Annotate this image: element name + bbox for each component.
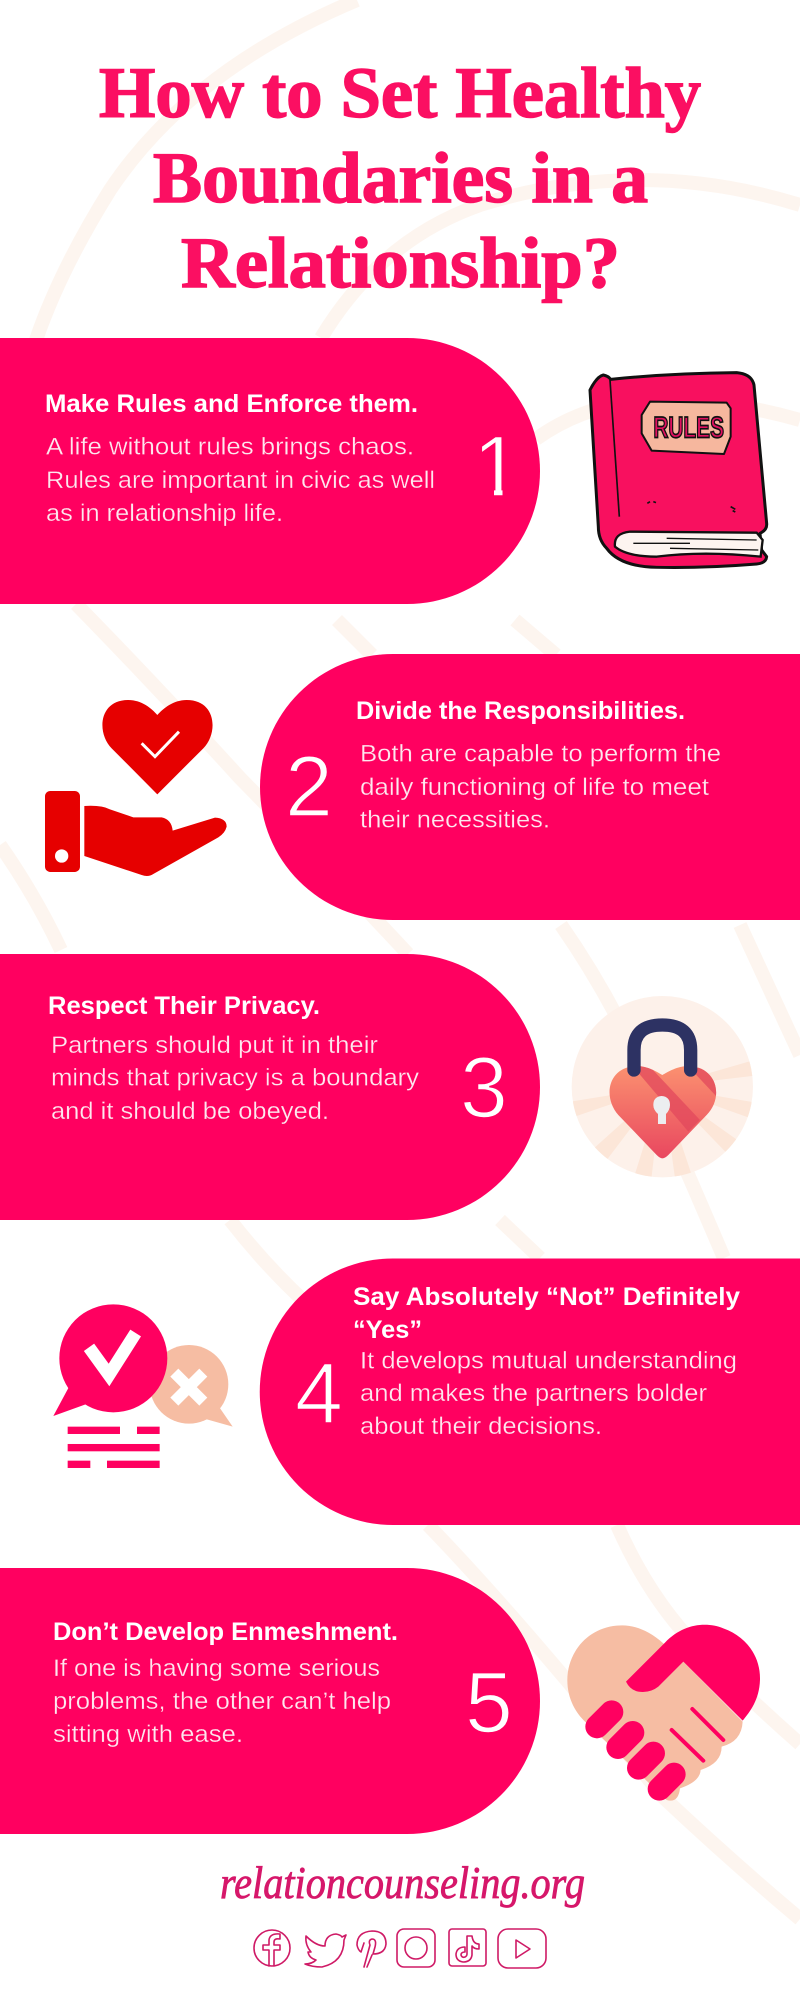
body text: step 1: Rules are important in civic as well [46, 467, 435, 494]
body text: step 4 [360, 1348, 737, 1440]
number 3: 3 [460, 1040, 508, 1136]
body text: step 2 [360, 740, 721, 834]
title: Relationship? [181, 223, 620, 303]
icon: hand holding heart [45, 700, 227, 876]
title: Boundaries in a [153, 138, 648, 218]
number 4: 4 [295, 1346, 343, 1442]
icon: rules book [590, 373, 767, 568]
icon: youtube [498, 1929, 546, 1968]
body text: step 3: minds that privacy is a boundary [51, 1065, 420, 1092]
number 5: 5 [465, 1655, 513, 1751]
panel: step 3 [0, 954, 540, 1220]
icon: handshake heart [567, 1625, 760, 1801]
icon: facebook [254, 1930, 290, 1966]
body text: step 5: problems, the other can’t help [53, 1688, 391, 1715]
body text: step 5: sitting with ease. [53, 1721, 243, 1748]
body text: step 3: and it should be obeyed. [51, 1098, 329, 1125]
title [99, 53, 701, 303]
title: How to Set Healthy [99, 53, 701, 133]
heading: step 2: Divide the Responsibilities. [356, 697, 685, 725]
body text: step 5 [53, 1655, 391, 1748]
body text: step 4: It develops mutual understanding [360, 1348, 737, 1374]
heading: step 4: “Yes” [353, 1316, 422, 1344]
body text: step 2: Both are capable to perform the [360, 740, 721, 768]
body text: step 1 [46, 434, 435, 527]
icon: tiktok [449, 1929, 486, 1966]
icon: instagram [397, 1929, 435, 1967]
panel: step 1 [0, 338, 540, 604]
body text: step 2: their necessities. [360, 806, 550, 834]
body text: step 1: as in relationship life. [46, 500, 283, 527]
heading: step 1: Make Rules and Enforce them. [45, 390, 418, 418]
body text: step 3 [51, 1032, 420, 1125]
body text: step 1: A life without rules brings chaos. [46, 434, 414, 460]
heading: step 4 [353, 1283, 740, 1344]
icon: speech bubbles yes and no [53, 1304, 233, 1468]
panel: step 2 [260, 654, 800, 920]
panel: step 4 [260, 1258, 800, 1525]
icon: pinterest [357, 1931, 386, 1967]
body text: step 2: daily functioning of life to meet [360, 774, 709, 801]
icon: heart padlock [572, 996, 753, 1178]
website url: relationcounseling.org [220, 1857, 585, 1908]
body text: step 3: Partners should put it in their [51, 1032, 378, 1059]
panel: step 5 [0, 1568, 540, 1834]
icon: twitter [305, 1934, 346, 1967]
icon: rules book: RULES [653, 411, 724, 444]
heading: step 4: Say Absolutely “Not” Definitely [353, 1283, 740, 1311]
heading: step 5: Don’t Develop Enmeshment. [53, 1618, 398, 1646]
heading: step 3: Respect Their Privacy. [48, 992, 320, 1020]
number 2: 2 [285, 739, 333, 835]
body text: step 4: and makes the partners bolder [360, 1380, 707, 1407]
social icons [254, 1929, 546, 1968]
body text: step 5: If one is having some serious [53, 1655, 380, 1682]
number 1: 1 [473, 419, 521, 515]
body text: step 4: about their decisions. [360, 1413, 602, 1440]
